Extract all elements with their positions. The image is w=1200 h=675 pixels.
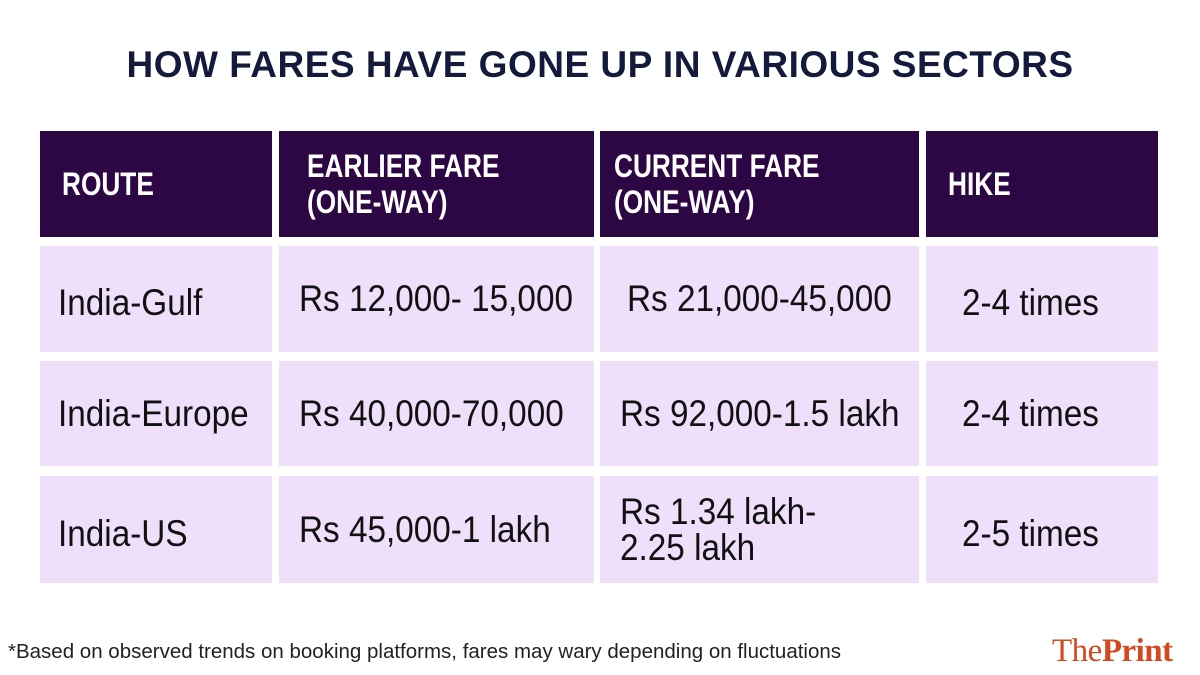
row: India-US [40,476,272,583]
table: Rs 12,000- 15,000 [299,278,573,319]
header: hike [926,131,1158,237]
table: 2.25 lakh [620,526,755,568]
table: Rs 21,000-45,000 [627,278,892,319]
logo: ThePrint [1052,633,1173,669]
row: India-Gulf: India-Gulf [58,282,202,323]
row: India-Europe: India-Europe [58,392,249,434]
table: Rs 45,000-1 lakh [299,508,551,550]
header: current fare: (ONE-WAY) [614,184,754,220]
row: India-US: India-US [58,512,188,554]
table: Rs 92,000-1.5 lakh [620,392,900,434]
header: route [40,131,272,237]
table: 2-4 times [962,282,1099,323]
header: current fare [600,131,919,237]
header: earlier fare: (ONE-WAY) [307,184,447,220]
header: hike: HIKE [948,166,1011,202]
header: earlier fare [279,131,594,237]
table: Rs 1.34 lakh- [620,490,816,532]
title: HOW FARES HAVE GONE UP IN VARIOUS SECTORS [126,44,1074,85]
row: India-Gulf [40,246,272,352]
table: Rs 40,000-70,000 [299,392,564,434]
header: route: ROUTE [62,166,154,202]
header: current fare: CURRENT FARE [614,148,820,184]
table: 2-4 times [962,392,1099,434]
table: 2-5 times [962,512,1099,554]
footnote: *Based on observed trends on booking platforms, fares may wary depending on fluctuations [8,640,841,663]
header: earlier fare: EARLIER FARE [307,148,499,184]
row: India-Europe [40,361,272,466]
